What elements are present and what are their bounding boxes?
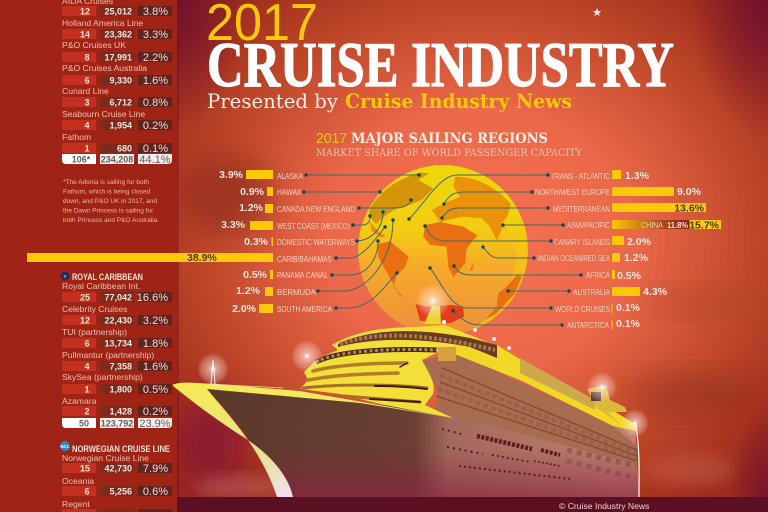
Bermuda: 1.2% bbox=[236, 285, 261, 297]
forward superstructure bbox=[300, 327, 470, 418]
africa bbox=[423, 222, 477, 277]
Cunard Line row bbox=[62, 86, 172, 109]
P&O Cruises UK row: 8 bbox=[84, 52, 90, 62]
P&O Cruises Australia row: P&O Cruises Australia bbox=[62, 63, 147, 73]
Domestic Waterways: 0.3% bbox=[244, 236, 269, 248]
Mediterranean: 13.6% bbox=[674, 202, 705, 214]
Pullmantur partnership row: 7,358 bbox=[109, 361, 132, 371]
Australia: 4.3% bbox=[643, 286, 668, 298]
Holland America Line row: 14 bbox=[80, 29, 90, 39]
Holland America Line row: 3.3% bbox=[143, 29, 168, 41]
Panama Canal bbox=[243, 269, 328, 281]
footnote: *The Adonia is sailing for both bbox=[63, 179, 149, 186]
Azamara row: 1,428 bbox=[109, 406, 132, 416]
TUI partnership row: 13,734 bbox=[104, 338, 132, 348]
Regent row: Regent bbox=[62, 499, 90, 509]
Celebrity Cruises row bbox=[62, 304, 172, 327]
Norwegian Cruise Line row: 15 bbox=[80, 463, 90, 473]
AIDA Cruises row: 25,012 bbox=[104, 6, 132, 16]
Seabourn Cruise Line row: Seabourn Cruise Line bbox=[62, 109, 145, 119]
footnote: both Princess and P&O Australia. bbox=[63, 217, 159, 224]
antarctica bbox=[415, 303, 464, 323]
Canada New England bbox=[239, 202, 355, 214]
balcony decks bbox=[421, 353, 637, 465]
australia bbox=[485, 275, 522, 320]
Seabourn Cruise Line row: 4 bbox=[84, 120, 90, 130]
AIDA Cruises row bbox=[62, 0, 172, 18]
hull bbox=[207, 389, 639, 497]
footnote: the Dawn Princess is sailing for bbox=[63, 208, 154, 214]
Azamara row bbox=[62, 396, 172, 418]
Fathom row: 0.1% bbox=[143, 143, 168, 155]
Cunard Line row: 6,712 bbox=[109, 97, 132, 107]
forward mast bbox=[424, 306, 441, 324]
heading: major sailing regions: MAJOR SAILING REGIONS bbox=[351, 131, 548, 147]
Bermuda bbox=[236, 285, 316, 297]
Royal Caribbean Int. row: 77,042 bbox=[104, 292, 132, 302]
Canada New England: 1.2% bbox=[239, 202, 264, 214]
Asia Pacific: 15.7% bbox=[689, 220, 720, 232]
Domestic Waterways: DOMESTIC WATERWAYS bbox=[277, 237, 355, 247]
TUI partnership row: 6 bbox=[84, 338, 90, 348]
P&O Cruises UK row: P&O Cruises UK bbox=[62, 40, 126, 50]
Trans-Atlantic: 1.3% bbox=[625, 170, 650, 182]
West Coast Mexico: 3.3% bbox=[221, 219, 246, 231]
SkySea partnership row: 1 bbox=[84, 384, 90, 394]
Celebrity Cruises row: 22,430 bbox=[104, 315, 132, 325]
Carnival totals row: 234,208 bbox=[101, 154, 133, 164]
Carib Bahamas: CARIB/BAHAMAS bbox=[277, 254, 332, 264]
Domestic Waterways bbox=[244, 236, 355, 248]
footnote: down, and P&O UK in 2017, and bbox=[63, 198, 157, 205]
Celebrity Cruises row: 12 bbox=[80, 315, 90, 325]
Royal Caribbean totals row: 50 bbox=[79, 418, 89, 428]
Norwegian Cruise Line heading: NORWEGIAN CRUISE LINE bbox=[72, 444, 170, 455]
North West Europe: 9.0% bbox=[677, 186, 702, 198]
Australia bbox=[573, 286, 668, 298]
Indian Ocean Red Sea: INDIAN OCEAN/RED SEA bbox=[538, 253, 610, 263]
AIDA Cruises row: 12 bbox=[80, 6, 90, 16]
SkySea partnership row: 0.5% bbox=[143, 384, 168, 396]
Royal Caribbean heading bbox=[60, 272, 143, 283]
Seabourn Cruise Line row: 0.2% bbox=[143, 120, 168, 132]
Seabourn Cruise Line row bbox=[62, 109, 172, 132]
roof strip bbox=[400, 325, 637, 431]
hull windows bbox=[442, 429, 636, 479]
Asia Pacific: CHINA bbox=[641, 221, 664, 230]
P&O Cruises Australia row bbox=[62, 63, 172, 87]
globe bbox=[358, 165, 528, 335]
Royal Caribbean heading: ♆ bbox=[62, 274, 68, 281]
aft tower bbox=[587, 385, 627, 424]
Canary Islands: 2.0% bbox=[627, 236, 652, 248]
Cunard Line row: Cunard Line bbox=[62, 86, 109, 96]
Oceania row: Oceania bbox=[62, 476, 94, 486]
Hawaii: HAWAII bbox=[277, 187, 301, 197]
Oceania row bbox=[62, 476, 172, 498]
World Cruises: 0.1% bbox=[616, 302, 641, 314]
footnote bbox=[63, 179, 159, 224]
Norwegian Cruise Line heading bbox=[60, 441, 170, 455]
Bermuda: BERMUDA bbox=[277, 287, 316, 297]
Antarctica bbox=[567, 318, 641, 330]
Carnival totals row: 106* bbox=[72, 154, 91, 164]
Hawaii bbox=[240, 186, 301, 198]
Panama Canal: 0.5% bbox=[243, 269, 268, 281]
Carnival totals row bbox=[62, 154, 172, 166]
connector lines right bbox=[407, 173, 583, 327]
madagascar bbox=[469, 262, 474, 272]
Australia: AUSTRALIA bbox=[573, 287, 610, 297]
Asia Pacific: ASIA/PACIFIC bbox=[567, 220, 610, 230]
Norwegian Cruise Line row: 7.9% bbox=[143, 463, 168, 475]
South America: SOUTH AMERICA bbox=[277, 304, 332, 314]
Holland America Line row: Holland America Line bbox=[62, 18, 143, 28]
Azamara row: 2 bbox=[84, 406, 90, 416]
Celebrity Cruises row: 3.2% bbox=[143, 315, 168, 327]
Oceania row: 6 bbox=[84, 486, 90, 496]
Asia Pacific bbox=[567, 220, 721, 232]
Holland America Line row bbox=[62, 18, 172, 41]
Mediterranean: MEDITERRANEAN bbox=[553, 204, 610, 214]
copyright: © Cruise Industry News bbox=[559, 501, 649, 511]
Azamara row: 0.2% bbox=[143, 406, 168, 418]
Alaska: ALASKA bbox=[277, 171, 303, 181]
Royal Caribbean totals row bbox=[62, 418, 172, 430]
heading: major sailing regions: 2017 bbox=[316, 130, 347, 147]
Africa: 0.5% bbox=[617, 270, 642, 282]
Antarctica: ANTARCTICA bbox=[567, 320, 609, 330]
West Coast Mexico bbox=[221, 219, 350, 231]
North West Europe: NORTH/WEST EUROPE bbox=[535, 187, 610, 197]
SkySea partnership row bbox=[62, 372, 172, 396]
south america bbox=[377, 241, 409, 298]
SkySea partnership row: SkySea (partnership) bbox=[62, 372, 143, 382]
Fathom row bbox=[62, 132, 172, 155]
ship lights bbox=[197, 284, 649, 437]
Royal Caribbean heading: ROYAL CARIBBEAN bbox=[72, 272, 143, 283]
TUI partnership row: 1.8% bbox=[143, 338, 168, 350]
central america bbox=[370, 222, 386, 237]
Holland America Line row: 23,362 bbox=[104, 29, 132, 39]
Azamara row: Azamara bbox=[62, 396, 97, 406]
Cunard Line row: 3 bbox=[84, 97, 90, 107]
TUI partnership row: TUI (partnership) bbox=[62, 327, 127, 337]
Asia Pacific: 11.8% bbox=[667, 220, 688, 230]
TUI partnership row bbox=[62, 327, 172, 350]
right region labels and bars bbox=[535, 170, 721, 330]
South America bbox=[232, 303, 332, 315]
Pullmantur partnership row bbox=[62, 350, 172, 373]
P&O Cruises UK row bbox=[62, 40, 172, 64]
icon: star: ★ bbox=[592, 6, 602, 19]
Indian Ocean Red Sea: 1.2% bbox=[624, 252, 649, 264]
World Cruises: WORLD CRUISES bbox=[555, 304, 610, 314]
Canary Islands bbox=[554, 236, 652, 248]
P&O Cruises UK row: 2.2% bbox=[143, 52, 168, 64]
Trans-Atlantic bbox=[551, 170, 650, 182]
Oceania row: 5,256 bbox=[109, 486, 132, 496]
heading: major sailing regions: MARKET SHARE OF WORLD PASSENGER CAPACITY bbox=[316, 147, 583, 159]
Royal Caribbean Int. row: 25 bbox=[80, 292, 90, 302]
South America: 2.0% bbox=[232, 303, 257, 315]
P&O Cruises Australia row: 9,330 bbox=[109, 75, 132, 85]
left region labels and bars bbox=[187, 169, 355, 315]
left carrier table panel bbox=[0, 0, 179, 512]
north america bbox=[369, 173, 433, 224]
Alaska bbox=[219, 169, 303, 181]
Pullmantur partnership row: Pullmantur (partnership) bbox=[62, 350, 154, 360]
Norwegian Cruise Line row: Norwegian Cruise Line bbox=[62, 453, 149, 463]
Royal Caribbean Int. row: 16.6% bbox=[137, 292, 168, 304]
Carib Bahamas bbox=[187, 252, 332, 264]
West Coast Mexico: WEST COAST (MEXICO) bbox=[277, 221, 350, 231]
Oceania row: 0.6% bbox=[143, 486, 168, 498]
Regent row bbox=[62, 499, 172, 512]
P&O Cruises Australia row: 6 bbox=[84, 75, 90, 85]
footnote: Fathom, which is being closed bbox=[63, 188, 150, 196]
bridge windows bbox=[316, 331, 497, 362]
stern line bbox=[636, 426, 639, 497]
water band bbox=[177, 497, 768, 512]
Canada New England: CANADA NEW ENGLAND bbox=[277, 204, 355, 214]
Trans-Atlantic: TRANS - ATLANTIC bbox=[551, 171, 610, 181]
Africa bbox=[586, 270, 642, 282]
Hawaii: 0.9% bbox=[240, 186, 265, 198]
P&O Cruises UK row: 17,991 bbox=[104, 52, 132, 62]
AIDA Cruises row: 3.8% bbox=[143, 6, 168, 18]
Norwegian Cruise Line row bbox=[62, 453, 172, 475]
Royal Caribbean totals row: 23.9% bbox=[139, 418, 171, 430]
Norwegian Cruise Line row: 42,730 bbox=[104, 463, 132, 473]
Royal Caribbean Int. row: Royal Caribbean Int. bbox=[62, 281, 140, 291]
Norwegian Cruise Line heading: NCL bbox=[60, 444, 70, 449]
carib bar bbox=[27, 253, 273, 262]
Celebrity Cruises row: Celebrity Cruises bbox=[62, 304, 127, 314]
Panama Canal: PANAMA CANAL bbox=[277, 270, 328, 280]
Canary Islands: CANARY ISLANDS bbox=[554, 237, 610, 247]
heading: major sailing regions bbox=[316, 130, 583, 159]
North West Europe bbox=[535, 186, 702, 198]
Fathom row: Fathom bbox=[62, 132, 91, 142]
deck stripes bbox=[303, 363, 427, 402]
Africa: AFRICA bbox=[586, 270, 610, 280]
Carib Bahamas: 38.9% bbox=[187, 252, 217, 264]
Fathom row: 1 bbox=[84, 143, 90, 153]
Pullmantur partnership row: 1.6% bbox=[143, 361, 168, 373]
subtitle: presented by: Presented by bbox=[207, 89, 339, 113]
Alaska: 3.9% bbox=[219, 169, 244, 181]
Cunard Line row: 0.8% bbox=[143, 97, 168, 109]
bow strip bbox=[172, 383, 453, 497]
SkySea partnership row: 1,800 bbox=[109, 384, 132, 394]
cruise ship bbox=[172, 306, 639, 497]
eurasia bbox=[432, 177, 511, 241]
Fathom row: 680 bbox=[117, 143, 132, 153]
Pullmantur partnership row: 4 bbox=[84, 361, 90, 371]
connector lines left bbox=[302, 173, 421, 310]
Mediterranean bbox=[553, 202, 706, 214]
Royal Caribbean Int. row bbox=[62, 281, 172, 304]
P&O Cruises Australia row: 1.6% bbox=[143, 75, 168, 87]
Carnival totals row: 44.1% bbox=[139, 154, 171, 166]
Royal Caribbean totals row: 123,792 bbox=[101, 418, 133, 428]
subtitle: presented by: Cruise Industry News bbox=[345, 89, 572, 113]
Antarctica: 0.1% bbox=[616, 318, 641, 330]
Seabourn Cruise Line row: 1,954 bbox=[109, 120, 132, 130]
